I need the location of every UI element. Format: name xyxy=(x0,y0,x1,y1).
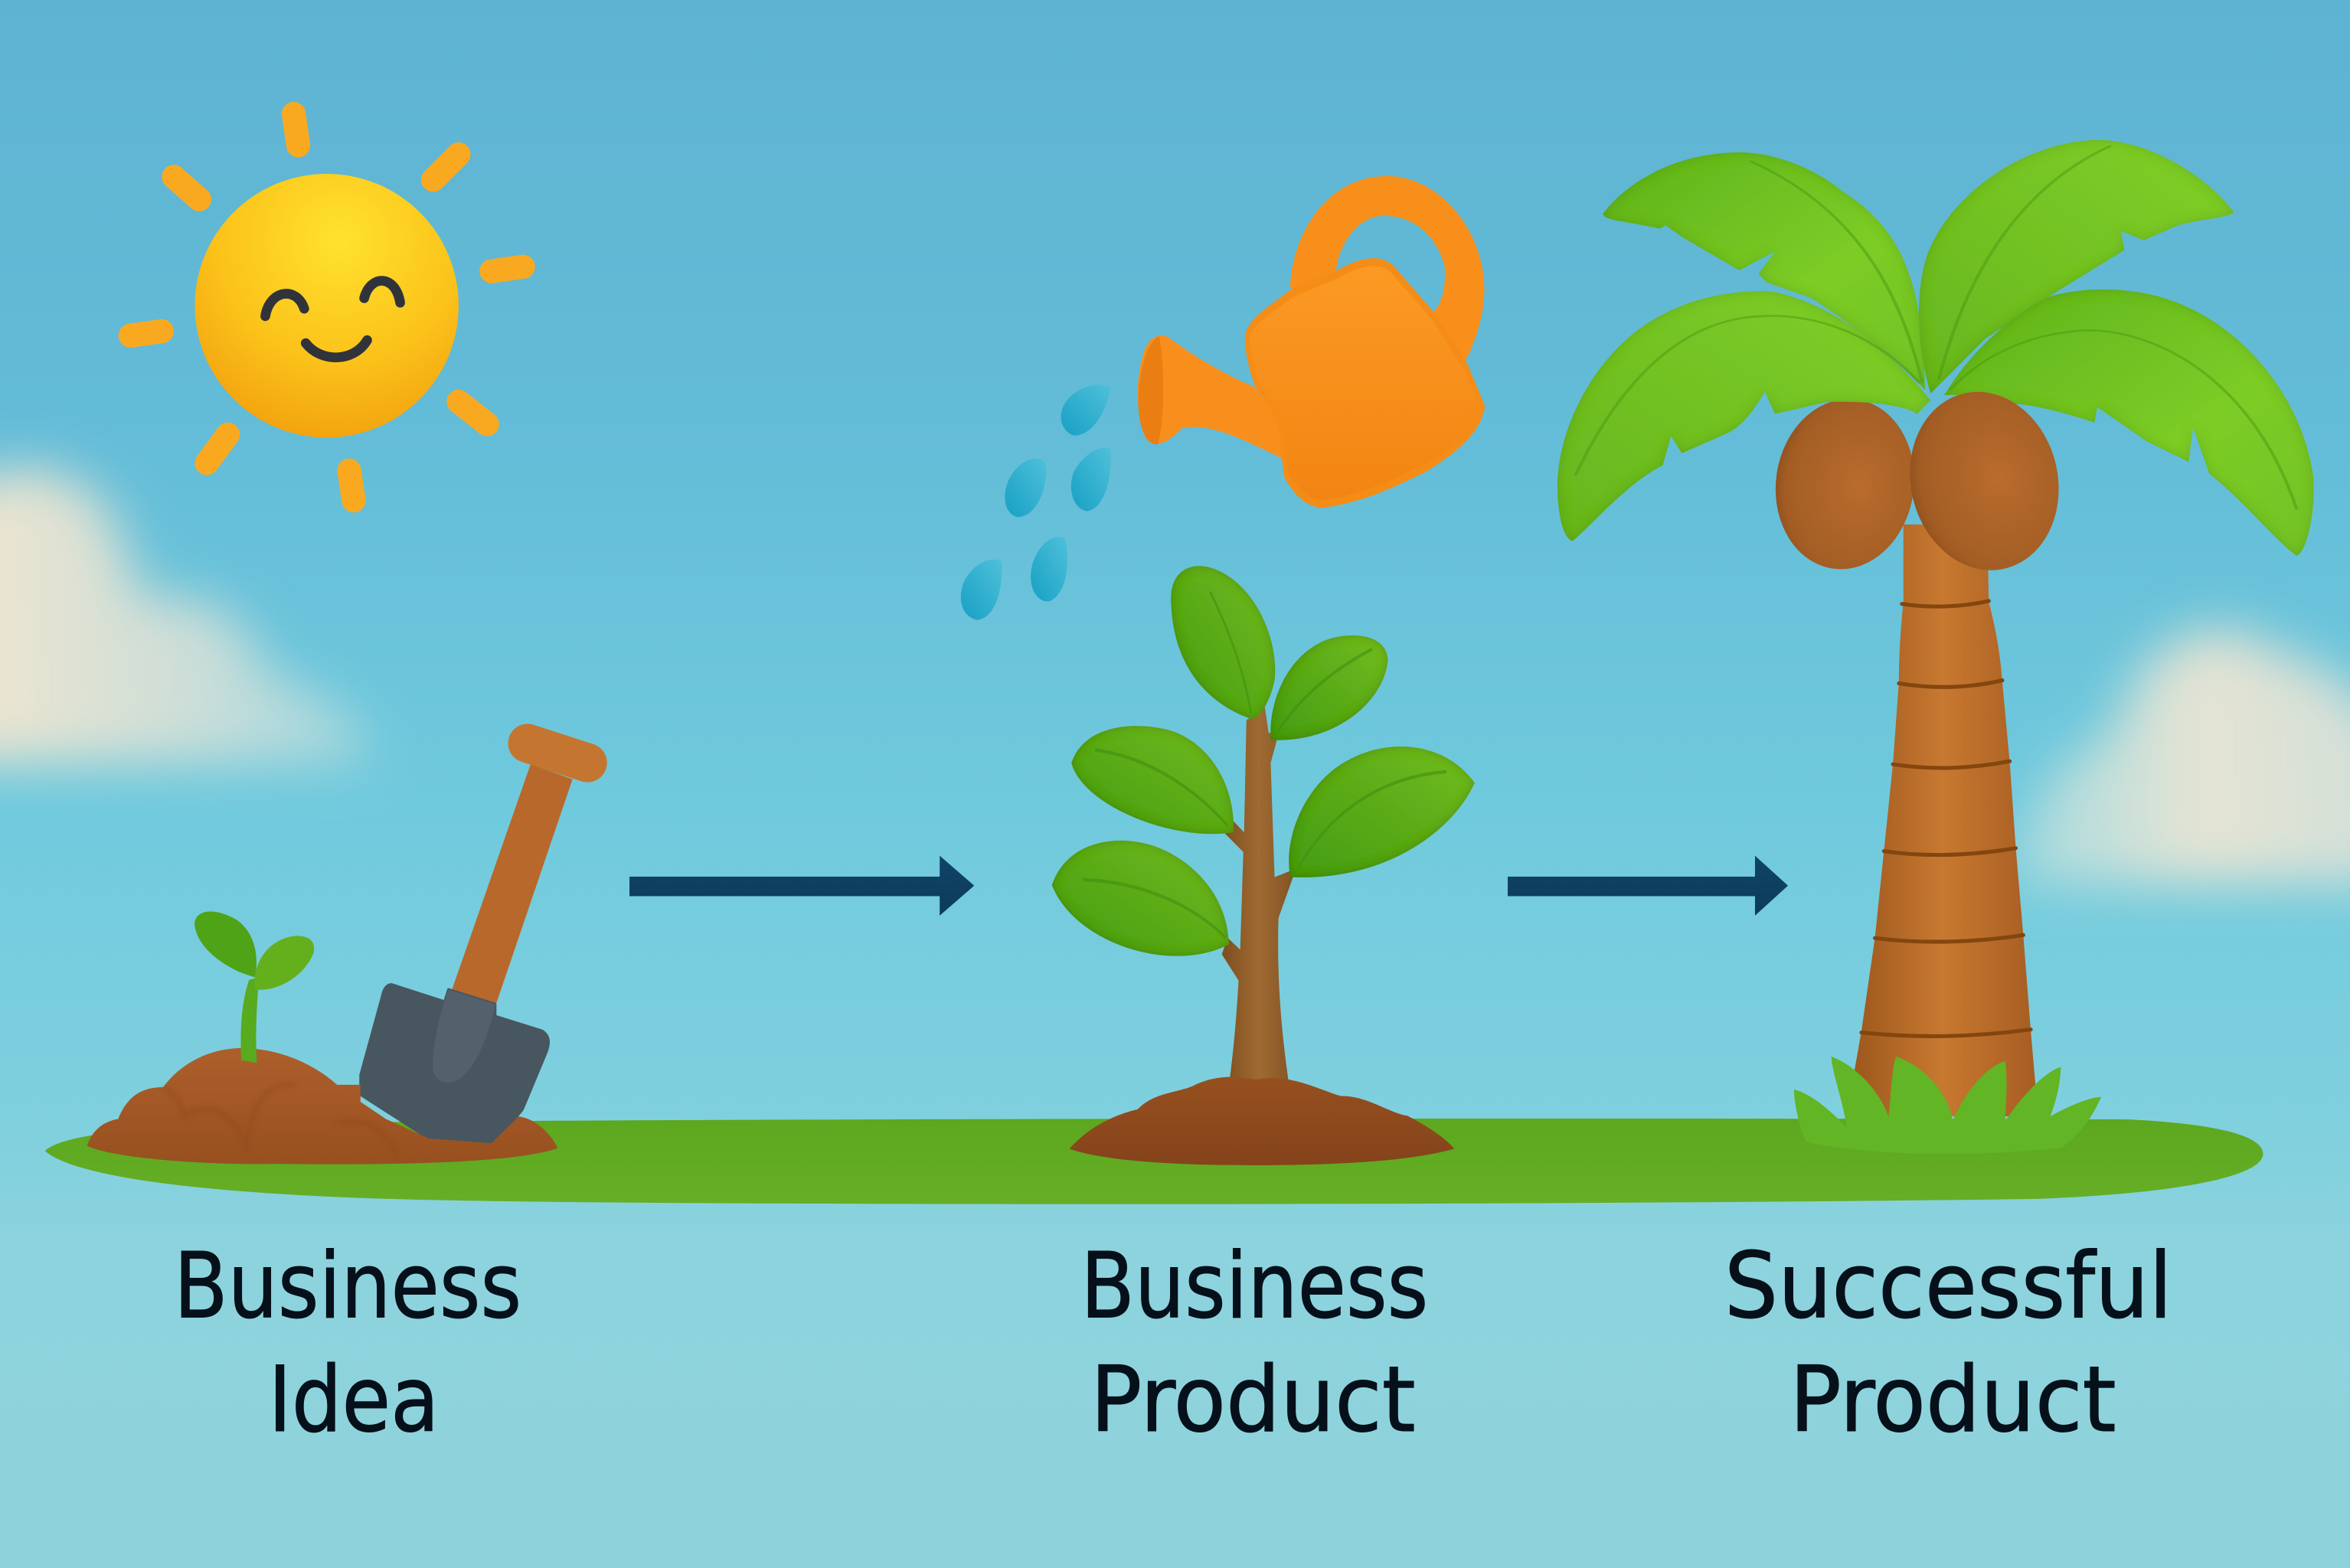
label: Business Product xyxy=(1080,1233,1428,1452)
sprout leaf left xyxy=(194,911,257,977)
back fronds xyxy=(1603,140,2314,556)
frond ribs xyxy=(1575,145,2297,510)
front frond xyxy=(1557,145,2297,541)
coconut left xyxy=(1765,390,1925,578)
sprout stem xyxy=(240,977,259,1063)
label: Successful Product: Product xyxy=(1789,1347,2116,1452)
sun rays xyxy=(130,114,523,501)
sun face xyxy=(265,281,400,358)
watering can body xyxy=(1247,262,1482,504)
label: Business Idea xyxy=(174,1233,521,1452)
plant leaves xyxy=(1052,566,1475,956)
shovel handle and grip xyxy=(451,743,587,1004)
water drops xyxy=(961,384,1111,620)
palm trunk xyxy=(1846,524,2038,1116)
shovel socket xyxy=(433,989,495,1083)
cloud right xyxy=(2016,629,2350,884)
sprout leaf right xyxy=(255,936,314,990)
label: Successful Product xyxy=(1724,1233,2172,1452)
watering can spout xyxy=(1138,335,1286,459)
plant stem xyxy=(1222,707,1296,1080)
frond back left xyxy=(1603,152,1925,390)
plant soil mound xyxy=(1070,1077,1454,1165)
label: Business Product: Product xyxy=(1090,1347,1416,1452)
label: Business Product: Business xyxy=(1080,1233,1428,1338)
cloud left xyxy=(0,469,368,764)
shovel blade xyxy=(361,985,548,1146)
icon: smiling sun xyxy=(130,114,523,501)
spout mouth xyxy=(1139,336,1163,444)
coconut right xyxy=(1893,377,2076,585)
ground strip xyxy=(45,1119,2263,1204)
arrow: product to successful product xyxy=(1508,856,1788,916)
shovel and soil xyxy=(87,911,557,1165)
watering can handle xyxy=(1290,176,1485,364)
label: Successful Product: Successful xyxy=(1724,1233,2172,1338)
frond left xyxy=(1557,291,1930,541)
soil lumps xyxy=(163,1084,397,1158)
sun disc xyxy=(194,174,459,438)
icon: young plant with watering can xyxy=(961,176,1485,1165)
leaf veins xyxy=(1083,592,1446,938)
arrow: idea to product xyxy=(629,856,974,916)
trunk segment joints xyxy=(1861,601,2031,1036)
label: Business Idea: Business xyxy=(174,1233,521,1338)
frond right xyxy=(1944,289,2314,556)
label: Business Idea: Idea xyxy=(268,1347,439,1452)
soil mound xyxy=(87,1048,557,1165)
frond back right xyxy=(1919,140,2234,394)
icon: shovel in soil with sprout xyxy=(87,743,587,1165)
palm base grass xyxy=(1794,1057,2101,1154)
icon: palm tree xyxy=(1557,140,2314,1154)
